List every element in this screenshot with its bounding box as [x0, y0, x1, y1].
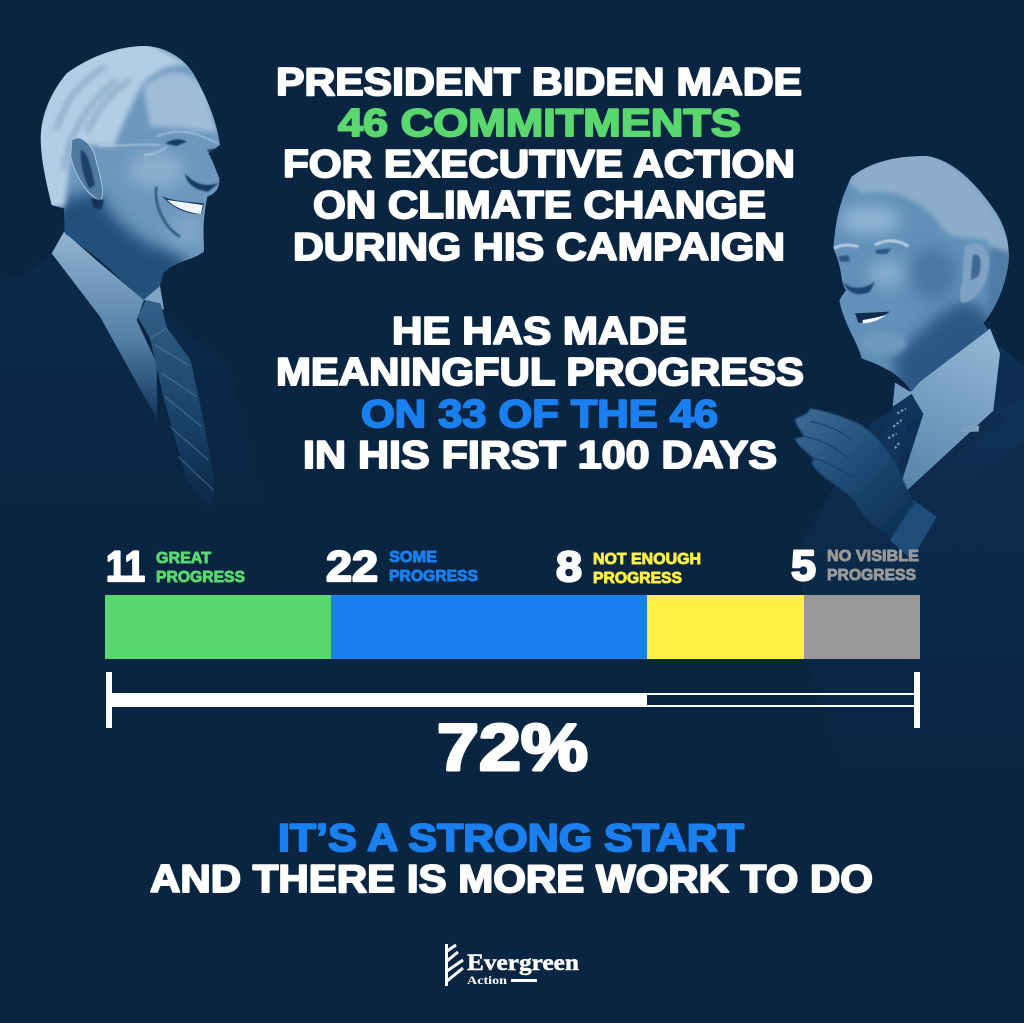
logo: Evergreen Action: Action [467, 973, 507, 987]
closing statement: IT’S A STRONG START [278, 817, 744, 860]
72 percent figure: 72% [437, 710, 588, 784]
right portrait tie [880, 395, 923, 468]
left portrait ear [71, 138, 102, 200]
72 percent bracket bar [106, 672, 920, 728]
right portrait hair [848, 156, 1009, 286]
right portrait forehead [840, 205, 900, 235]
headline: progress: IN HIS FIRST 100 DAYS [303, 434, 777, 477]
logo: Evergreen Action: Evergreen [467, 950, 579, 975]
right portrait neck shading [886, 296, 990, 392]
portrait: Biden speaking, right [794, 156, 1024, 570]
left portrait shirt collar [52, 232, 157, 420]
legend: some progress: 22 [326, 543, 378, 591]
headline: progress: ON 33 OF THE 46 [361, 393, 718, 436]
left portrait suit [0, 253, 263, 530]
left portrait ear shadow [81, 150, 95, 188]
legend: no visible progress [791, 542, 919, 590]
legend: not enough progress [556, 543, 701, 591]
legend: not enough progress: PROGRESS [593, 570, 682, 587]
right portrait shirt collar [893, 328, 1000, 491]
headline: progress [276, 310, 804, 477]
right portrait mouth [855, 312, 890, 323]
right portrait lapel [907, 348, 1024, 560]
right portrait hand [795, 408, 914, 537]
right portrait ear inner [971, 254, 981, 280]
right portrait suit [800, 347, 1024, 820]
right portrait cuff [890, 500, 937, 560]
legend: no visible progress: 5 [791, 542, 816, 590]
left portrait smile crease [156, 187, 180, 237]
icon: evergreen tree mark [446, 944, 463, 986]
left portrait tie [137, 300, 215, 517]
headline: commitments [276, 61, 802, 269]
left portrait neck shading [50, 190, 187, 307]
legend: great progress: 11 [106, 543, 145, 591]
right portrait lapel pin [962, 426, 979, 432]
logo: Evergreen Action [446, 944, 579, 987]
legend: some progress: SOME [389, 549, 437, 566]
left portrait forehead [143, 72, 217, 133]
closing statement [150, 817, 873, 901]
right portrait head [833, 156, 1009, 392]
closing statement: AND THERE IS MORE WORK TO DO [150, 858, 873, 901]
left portrait smile [162, 196, 204, 214]
left portrait eyes [164, 138, 216, 153]
legend: no visible progress: NO VISIBLE [827, 548, 919, 565]
left portrait cheek [128, 152, 185, 188]
portrait: Biden smiling, left [40, 46, 220, 494]
right portrait ear [960, 243, 989, 303]
right portrait brows [834, 241, 908, 248]
legend: not enough progress: 8 [556, 543, 582, 591]
headline: progress: HE HAS MADE [392, 310, 687, 353]
legend: great progress: GREAT [156, 550, 211, 567]
headline: progress: MEANINGFUL PROGRESS [276, 351, 804, 394]
legend: great progress: PROGRESS [156, 569, 245, 586]
right portrait cheek light [868, 258, 905, 288]
legend: great progress [106, 543, 245, 591]
left portrait brow and wrinkles [98, 132, 218, 155]
left portrait chin [168, 213, 205, 247]
headline: commitments: FOR EXECUTIVE ACTION [283, 143, 795, 186]
headline: commitments: ON CLIMATE CHANGE [313, 184, 766, 227]
right portrait finger lines [805, 422, 853, 478]
headline: commitments: 46 COMMITMENTS [338, 102, 741, 145]
headline: commitments: PRESIDENT BIDEN MADE [276, 61, 802, 104]
legend: not enough progress: NOT ENOUGH [593, 551, 701, 568]
right portrait nose shadow [843, 282, 875, 294]
legend: some progress: PROGRESS [389, 568, 478, 585]
left portrait hair streaks [57, 67, 130, 170]
legend: no visible progress: PROGRESS [827, 567, 916, 584]
legend: some progress [326, 543, 478, 591]
left portrait collar right [144, 282, 164, 310]
right portrait eyes [838, 248, 892, 262]
left portrait head [40, 46, 220, 300]
headline: commitments: DURING HIS CAMPAIGN [293, 226, 785, 269]
stacked progress bar [105, 595, 920, 659]
right portrait back hair shade [987, 244, 1009, 316]
left portrait hair [40, 46, 190, 210]
right portrait jaw [860, 332, 907, 355]
left portrait nose shadow [185, 173, 219, 192]
right portrait cheek shade [910, 247, 957, 300]
